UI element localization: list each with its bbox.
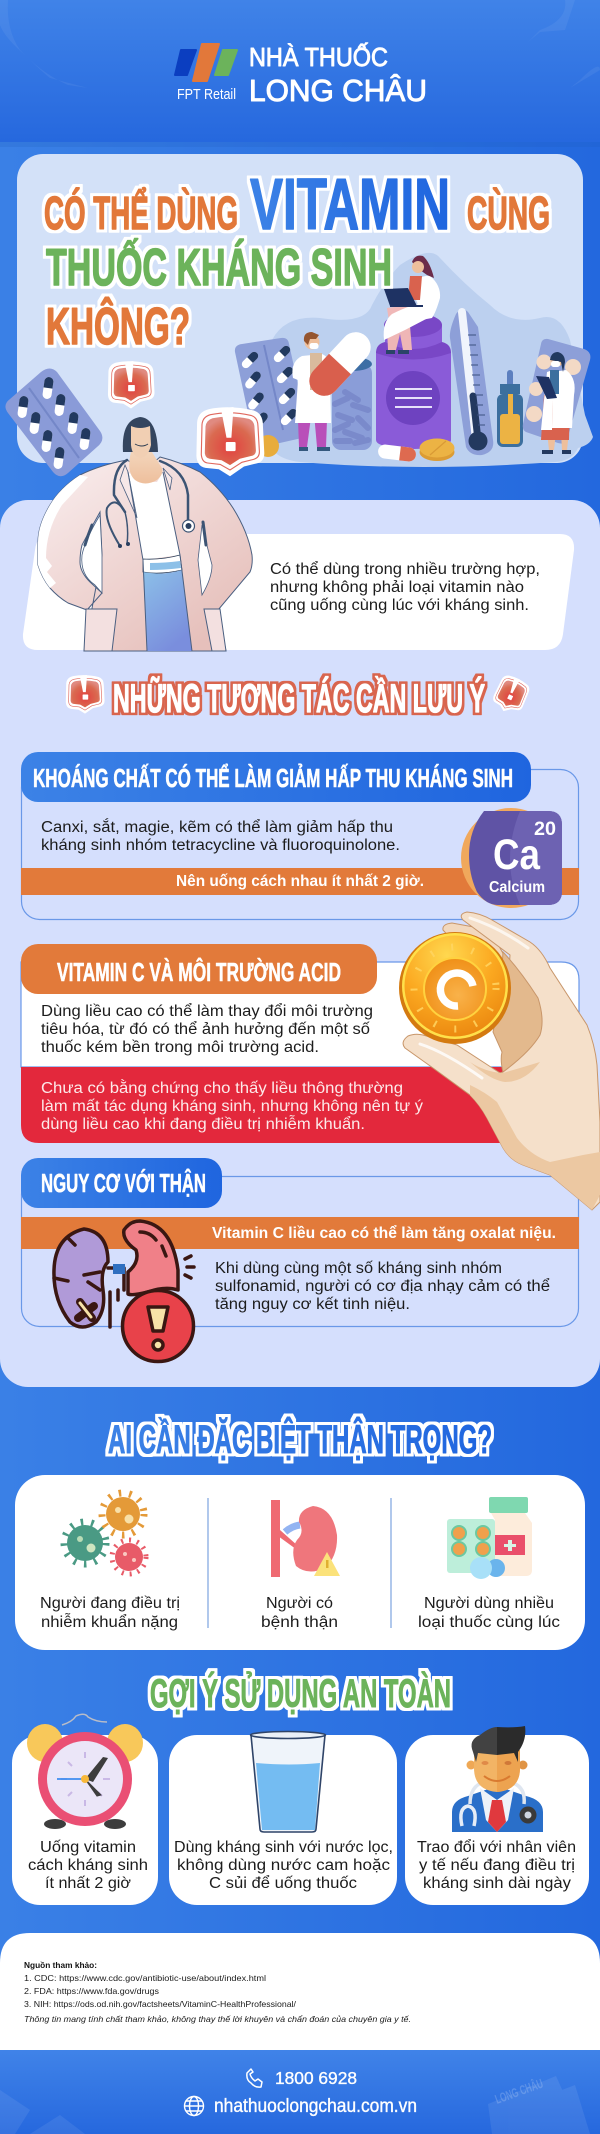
doctor shirt <box>128 472 180 560</box>
kidney text: Khi dùng cùng một số kháng sinh nhóm <box>215 1260 502 1277</box>
illustration: small capsule <box>377 444 417 462</box>
title line 3: KHÔNG? <box>46 297 190 356</box>
caution labels: Người dùng nhiều <box>424 1595 554 1612</box>
hero background <box>17 154 583 463</box>
acid card white background <box>21 962 579 1067</box>
timing text <box>28 1839 148 1892</box>
panel: safe use cards <box>12 1714 589 1905</box>
caution labels: bệnh thận <box>261 1614 338 1631</box>
icon: calcium tile: 20 <box>534 819 556 840</box>
acid text <box>41 1003 373 1056</box>
icon: calcium tile: Calcium <box>489 879 545 896</box>
intro card <box>23 534 574 650</box>
panel: who needs caution <box>15 1475 585 1650</box>
doctor gap left <box>82 515 102 593</box>
illustration: doctor character <box>38 417 252 651</box>
consult text: Trao đổi với nhân viên <box>417 1839 576 1856</box>
icon: calcium tile <box>461 808 562 908</box>
title line 1 left: CÓ THỂ DÙNG <box>44 187 238 239</box>
kidney text: tăng nguy cơ kết tinh niệu. <box>215 1296 410 1313</box>
logo <box>175 42 427 108</box>
hero background blob <box>268 253 593 467</box>
minerals advice: Nên uống cách nhau ít nhất 2 giờ. <box>176 873 424 890</box>
intro text: Có thể dùng trong nhiều trường hợp, <box>270 561 540 578</box>
minerals text <box>41 819 400 854</box>
minerals border <box>22 770 578 920</box>
timing card background <box>12 1735 158 1905</box>
caution labels: Người đang điều trị <box>40 1595 180 1612</box>
water card background <box>169 1735 397 1905</box>
acid warning text: làm mất tác dụng kháng sinh, nhưng không nên tự ý <box>41 1098 423 1115</box>
vitamin C coin <box>399 932 511 1044</box>
footer store sign: LONG CHÂU <box>493 2076 545 2107</box>
references heading: Nguồn tham khảo: <box>24 1960 97 1970</box>
hand lower shade <box>470 1085 600 1210</box>
consult text: y tế nếu đang điều trị <box>419 1857 575 1874</box>
doctor stethoscope <box>85 460 206 546</box>
acid warning text: Chưa có bằng chứng cho thấy liều thông thường <box>41 1080 403 1097</box>
website: nhathuoclongchau.com.vn <box>214 2096 417 2117</box>
timing text: cách kháng sinh <box>28 1857 148 1874</box>
kidney text: sulfonamid, người có cơ địa nhạy cảm có thể <box>215 1278 550 1295</box>
header band <box>0 0 600 147</box>
icon: calcium tile: Ca <box>493 831 541 879</box>
caution labels: loại thuốc cùng lúc <box>418 1614 560 1631</box>
intro text: cũng uống cùng lúc với kháng sinh. <box>270 597 529 614</box>
acid text: Dùng liều cao có thể làm thay đổi môi trường <box>41 1003 373 1020</box>
references list: 1. CDC: https://www.cdc.gov/antibiotic-use/about/index.html <box>24 1973 266 1983</box>
panel: main light section <box>0 500 600 1387</box>
illustration: thermometer <box>450 309 493 455</box>
caution card background <box>15 1475 585 1650</box>
card: water <box>169 1732 397 1905</box>
panel: kidney risk <box>21 1158 579 1362</box>
icon: glass of water <box>250 1732 326 1832</box>
minerals tab <box>21 752 531 802</box>
water text: Dùng kháng sinh với nước lọc, <box>174 1839 393 1856</box>
panel: minerals <box>21 752 579 920</box>
alert sticker large <box>196 407 264 476</box>
icon: globe <box>184 2096 204 2116</box>
doctor stethoscope chest piece <box>118 520 194 548</box>
intro text <box>270 561 540 614</box>
hand behind finger <box>443 923 515 975</box>
icon: phone <box>247 2069 262 2087</box>
acid tab <box>21 944 377 994</box>
card: consult <box>405 1726 589 1905</box>
doctor pockets <box>84 609 117 651</box>
minerals text: kháng sinh nhóm tetracycline và fluoroquinolone. <box>41 837 400 854</box>
acid text: tiêu hóa, từ đó có thể ảnh hưởng đến một số <box>41 1021 370 1038</box>
intro card background <box>23 534 574 650</box>
acid text: thuốc kém bền trong môi trường acid. <box>41 1039 319 1056</box>
consult text: kháng sinh dài ngày <box>423 1875 571 1892</box>
icon: kidneys with alert <box>54 1221 194 1362</box>
logo caption: FPT Retail <box>177 86 236 103</box>
icon: doctor <box>452 1726 543 1832</box>
illustration: woman with clipboard <box>536 352 575 454</box>
caution labels: Người có <box>266 1595 333 1612</box>
doctor jeans <box>143 570 192 651</box>
water text: C sủi để uống thuốc <box>209 1875 357 1892</box>
title keyword: VITAMIN <box>250 165 450 245</box>
title line 2: THUỐC KHÁNG SINH <box>46 238 392 297</box>
kidney tab <box>21 1158 222 1208</box>
illustration: blister pack right <box>523 339 590 444</box>
kidney border <box>22 1176 578 1326</box>
acid warning text: dùng liều cao khi đang điều trị nhiễm khuẩn. <box>41 1116 365 1133</box>
icon: germs <box>64 1493 146 1574</box>
kidney tab title: NGUY CƠ VỚI THẬN <box>41 1168 206 1198</box>
doctor face <box>131 426 151 458</box>
minerals text: Canxi, sắt, magie, kẽm có thể làm giảm hấp thu <box>41 819 393 836</box>
illustration: big capsule <box>303 326 377 402</box>
panel: vitamin C and acid <box>21 944 579 1143</box>
logo name line 2: LONG CHÂU <box>249 73 427 108</box>
consult text <box>417 1839 576 1892</box>
title line 1 right: CÙNG <box>467 187 550 239</box>
doctor lapels <box>120 465 172 518</box>
icon: kidney with warning <box>271 1500 340 1577</box>
references list: 3. NIH: https://ods.od.nih.gov/factsheets/VitaminC-HealthProfessional/ <box>24 1999 297 2009</box>
heading alert icon right <box>490 672 533 718</box>
intro text: nhưng không phải loại vitamin nào <box>270 579 524 596</box>
hand shape <box>403 912 600 1210</box>
doctor neck <box>129 452 162 484</box>
icon: medicines <box>447 1497 532 1579</box>
heading alert icon left <box>66 675 105 714</box>
minerals orange strip <box>21 868 579 895</box>
timing text: Uống vitamin <box>40 1839 136 1856</box>
illustration: capsule jar <box>332 357 372 450</box>
panel: references <box>0 1933 600 2052</box>
kidney orange strip <box>21 1217 579 1249</box>
dividers <box>208 1498 391 1628</box>
references disclaimer: Thông tin mang tính chất tham khảo, không thay thế lời khuyên và chẩn đoán của chuyên gia y tế. <box>24 2014 411 2024</box>
illustration: dropper bottle <box>497 370 523 447</box>
illustration: blister pack left <box>5 368 102 476</box>
water text <box>174 1839 393 1892</box>
illustration: blister pack middle <box>235 338 308 447</box>
acid red block <box>21 1067 579 1143</box>
alert sticker small <box>108 361 155 409</box>
doctor arms and coat outline <box>38 460 252 651</box>
doctor gap right <box>198 525 212 595</box>
doctor belt <box>143 555 182 573</box>
doctor coat highlights <box>38 475 88 588</box>
main panel background <box>0 500 600 1387</box>
illustration: man with capsule <box>292 332 331 451</box>
icon: alarm clock <box>27 1714 143 1829</box>
consult card background <box>405 1735 589 1905</box>
acid warning text <box>41 1080 423 1133</box>
logo mark <box>175 44 237 81</box>
footer band <box>0 2050 600 2134</box>
section heading: interactions <box>66 672 533 721</box>
hand palm shadow <box>493 952 542 1072</box>
references background <box>0 1933 600 2052</box>
illustration: orange pill behind alert <box>257 435 279 457</box>
caution labels: nhiễm khuẩn nặng <box>41 1614 178 1631</box>
references list <box>24 1973 297 2009</box>
kidney text <box>215 1260 550 1313</box>
kidney strip text: Vitamin C liều cao có thể làm tăng oxalat niệu. <box>212 1225 556 1242</box>
acid tab title: VITAMIN C VÀ MÔI TRƯỜNG ACID <box>57 957 341 987</box>
logo name line 1: NHÀ THUỐC <box>249 42 388 72</box>
timing text: ít nhất 2 giờ <box>45 1875 131 1892</box>
footer store decoration <box>0 2076 590 2134</box>
card: timing <box>12 1714 158 1905</box>
illustration: woman on laptop <box>384 256 440 354</box>
phone number: 1800 6928 <box>275 2068 357 2088</box>
caution labels <box>40 1595 560 1631</box>
water text: không dùng nước cam hoặc <box>177 1857 390 1874</box>
illustration: hand holding vitamin C <box>399 912 600 1210</box>
illustration: purple bottle <box>376 313 451 449</box>
footer <box>0 2050 600 2134</box>
references list: 2. FDA: https://www.fda.gov/drugs <box>24 1986 159 1996</box>
illustration: gold tablet <box>420 438 454 461</box>
doctor hair <box>123 417 158 452</box>
panel: hero <box>5 154 593 476</box>
